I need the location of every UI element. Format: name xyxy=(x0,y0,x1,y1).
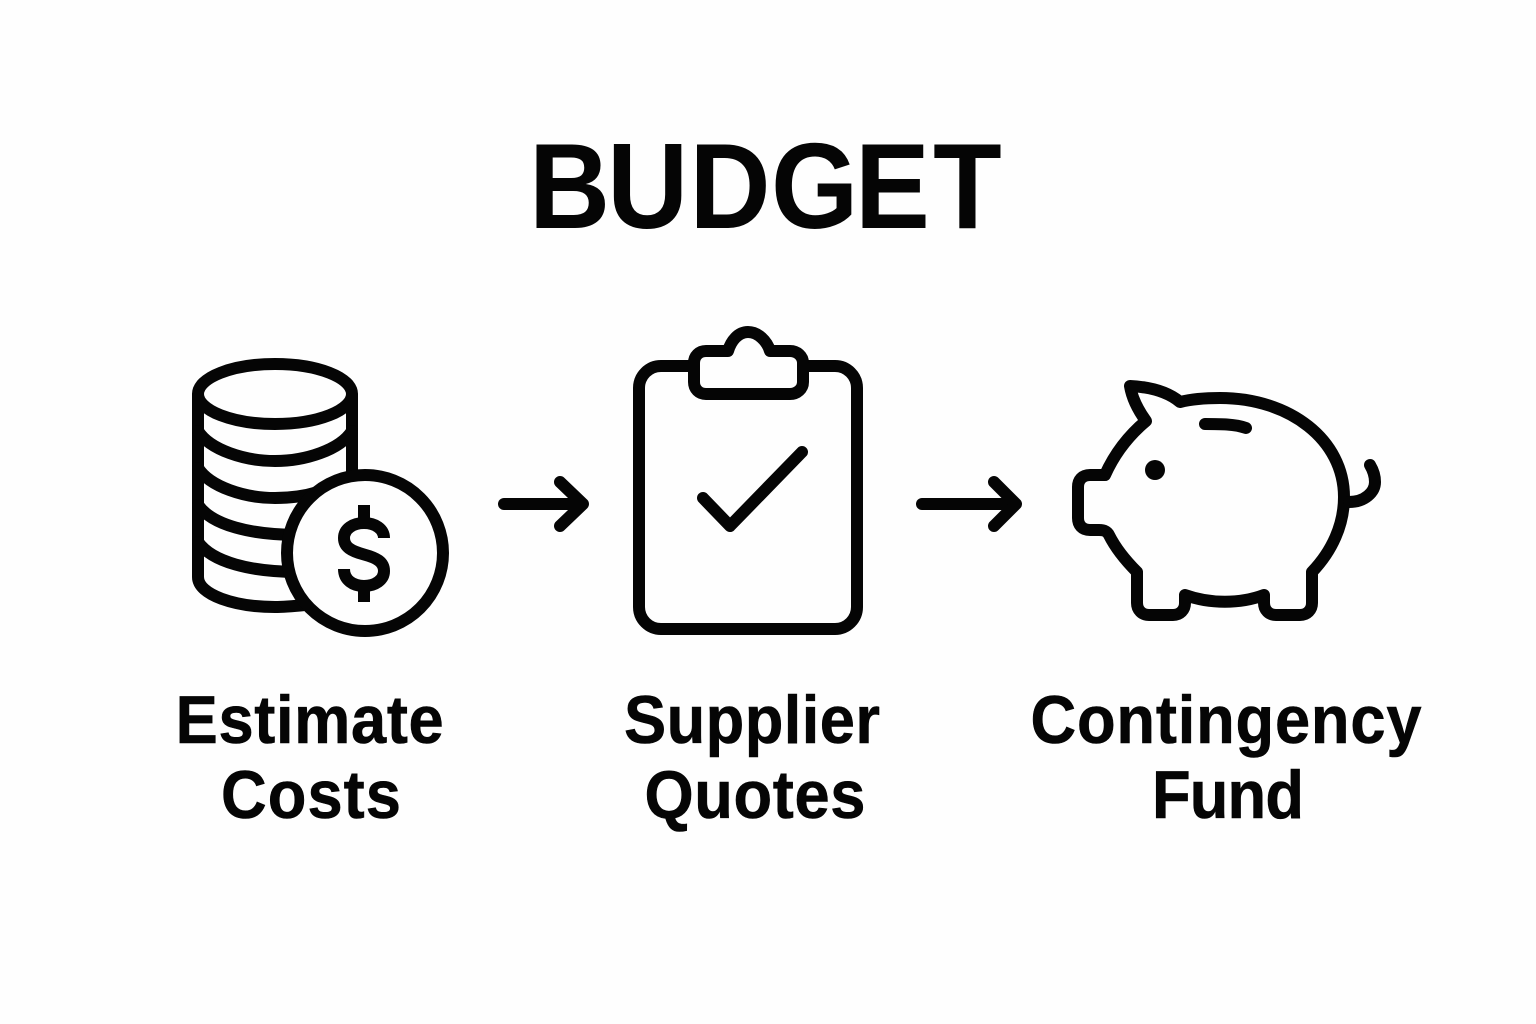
arrow: costs to quotes xyxy=(504,482,583,526)
label: Estimate Costs xyxy=(176,682,444,832)
icon: coin stack with dollar coin xyxy=(198,364,443,631)
label: Contingency Fund: Contingency xyxy=(1031,682,1422,757)
title: BUDGET xyxy=(529,118,1002,254)
label: Contingency Fund: Fund xyxy=(1152,757,1304,832)
arrow: quotes to fund xyxy=(922,482,1016,526)
label: Estimate Costs: Estimate xyxy=(176,682,444,757)
label: Supplier Quotes xyxy=(624,682,880,832)
label: Supplier Quotes: Supplier xyxy=(624,682,880,757)
label: Supplier Quotes: Quotes xyxy=(644,757,865,832)
label: Estimate Costs: Costs xyxy=(221,757,401,832)
icon: piggy bank xyxy=(1078,386,1375,615)
icon: clipboard with check xyxy=(639,332,857,629)
label: Contingency Fund xyxy=(1031,682,1422,832)
